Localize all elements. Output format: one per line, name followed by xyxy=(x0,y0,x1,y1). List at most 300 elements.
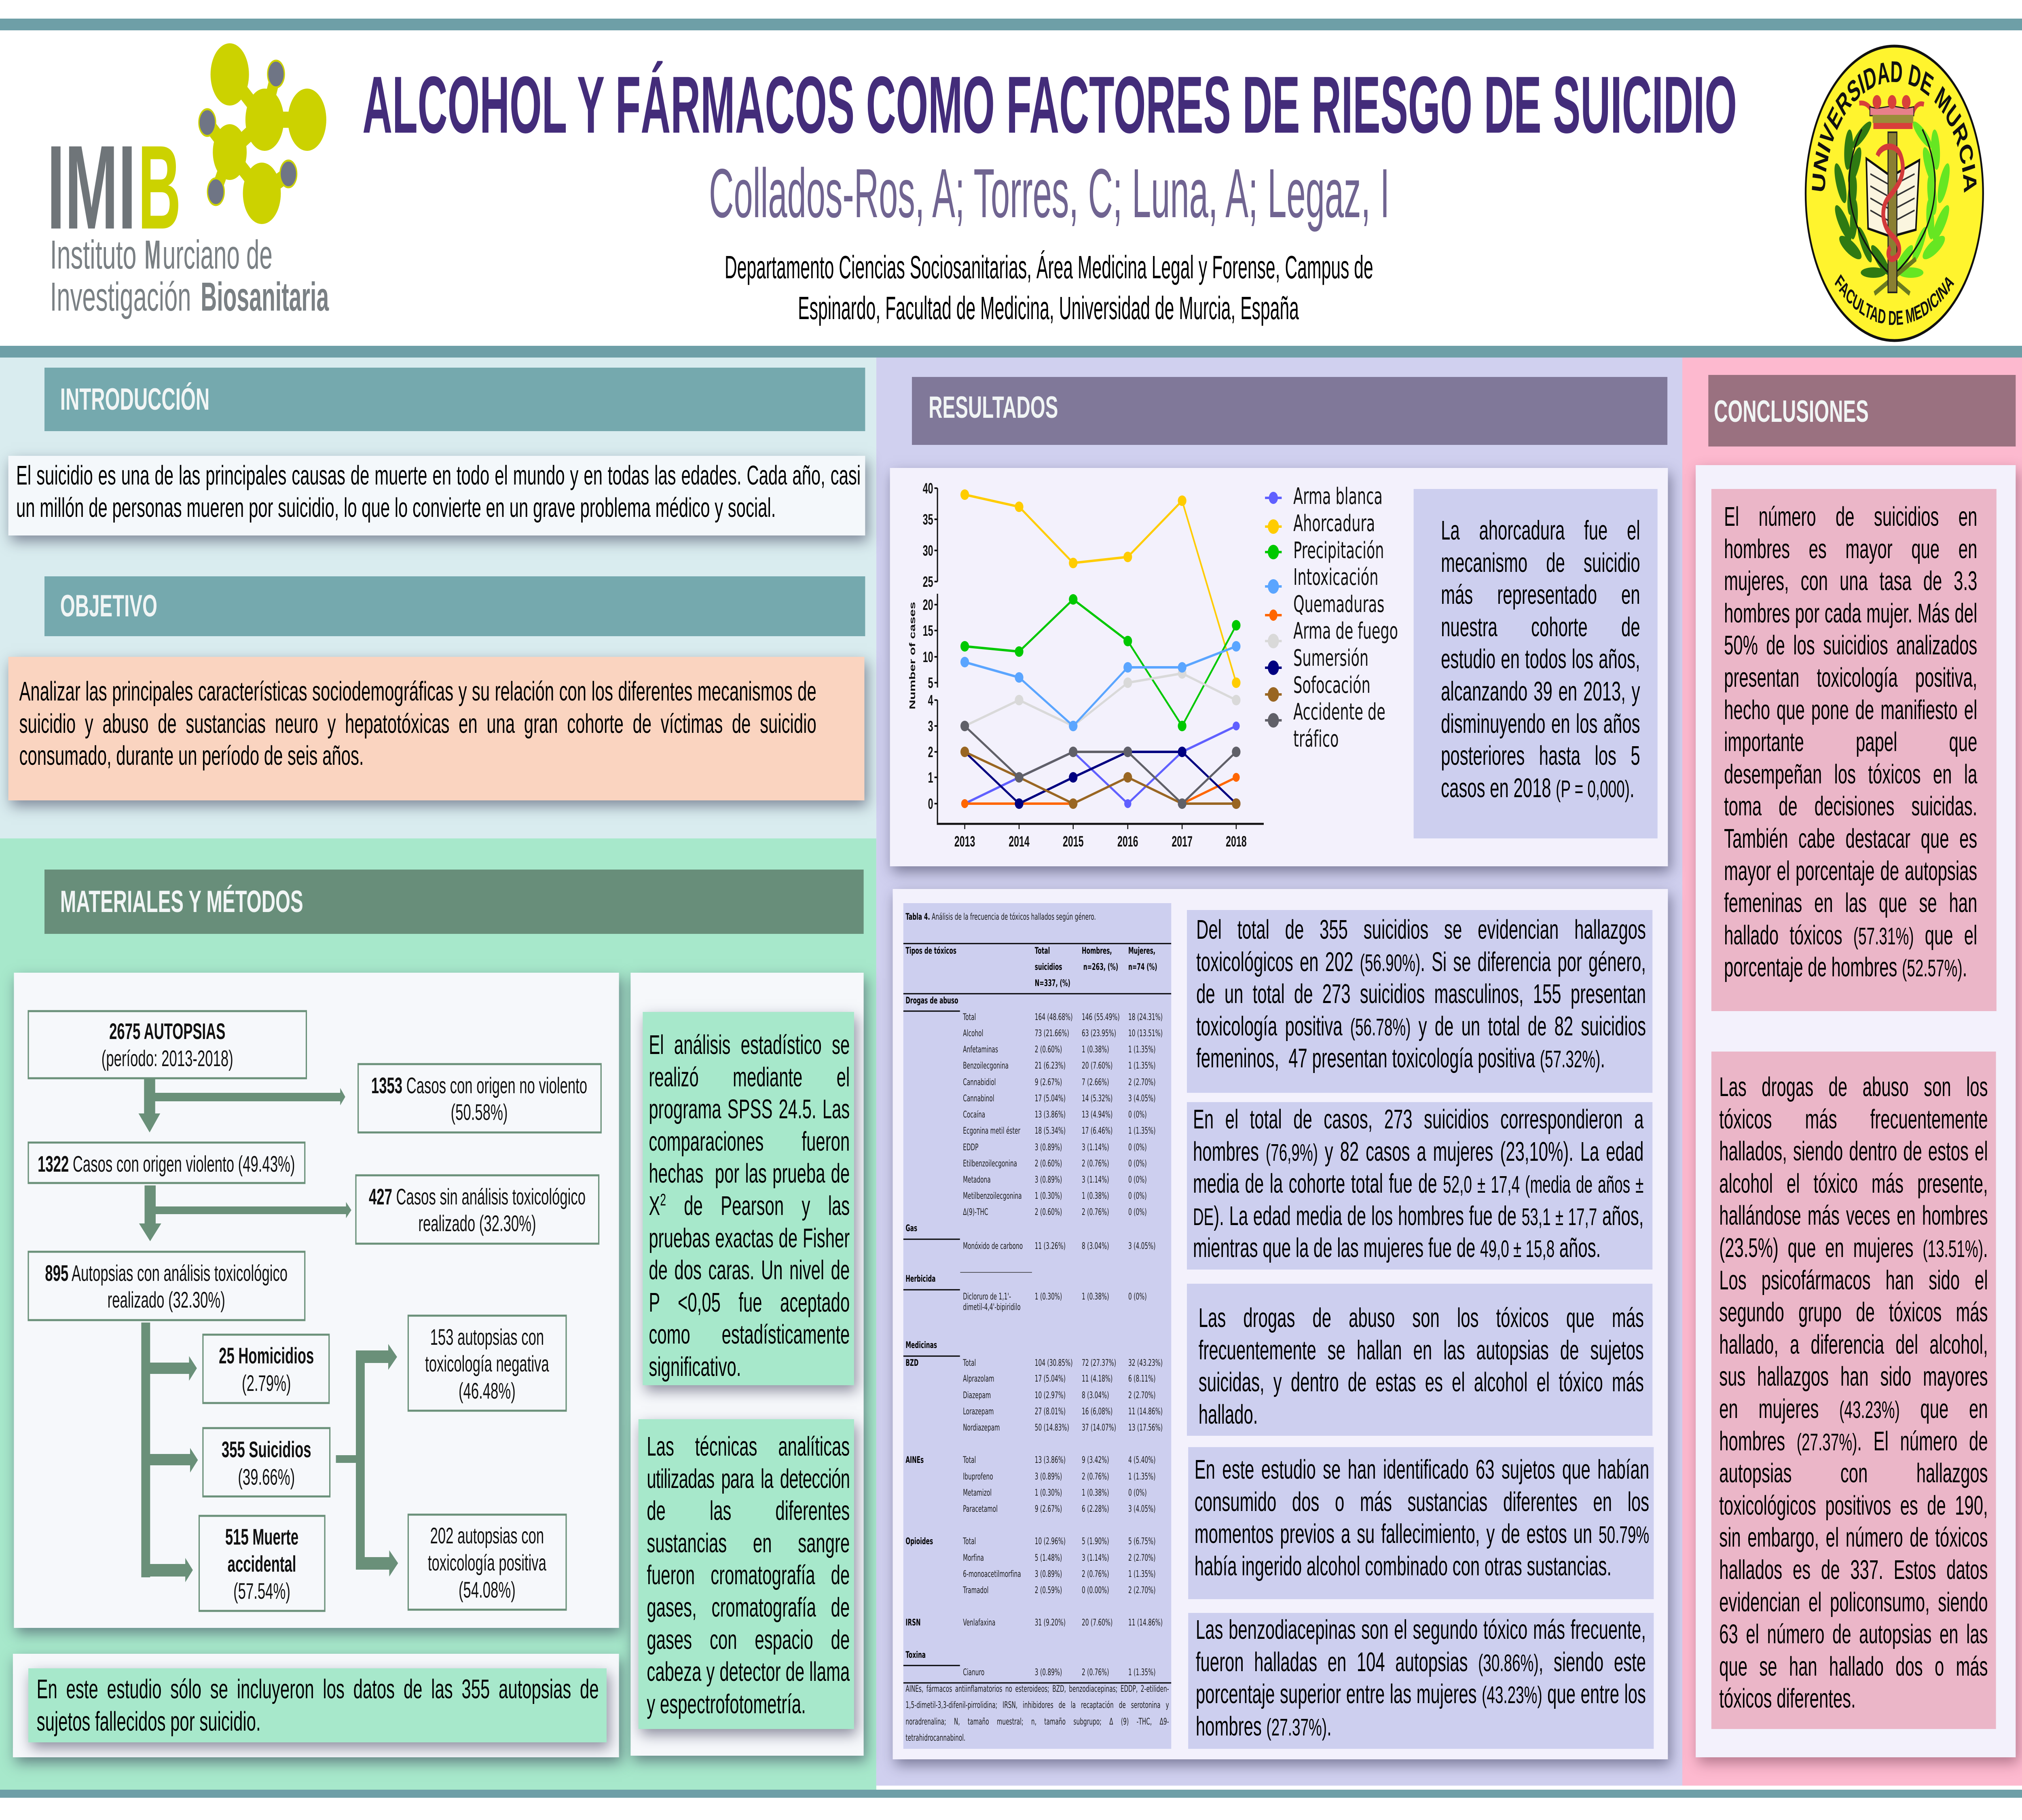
table: frecuencia de tóxicos: 6 (8.11%) xyxy=(1128,1374,1156,1384)
table: frecuencia de tóxicos: 3 (0.89%) xyxy=(1035,1143,1062,1153)
table: frecuencia de tóxicos: 8 (3.04%) xyxy=(1082,1241,1109,1251)
table: frecuencia de tóxicos: 1 (0.38%) xyxy=(1082,1045,1109,1055)
table: frecuencia de tóxicos: Lorazepam xyxy=(963,1407,994,1417)
table: frecuencia de tóxicos: 3 (1.14%) xyxy=(1082,1175,1109,1185)
text: conclusion 1: mujeres, con una tasa de 3.3 xyxy=(1724,566,1977,596)
text: chart commentary: estudio en todos los años, xyxy=(1441,644,1640,674)
legend: Precipitación xyxy=(1293,538,1384,564)
text: conclusion 1: hecho que pone de manifiesto el xyxy=(1724,695,1977,725)
text: statistical analysis: X2 de Pearson y las xyxy=(649,1190,850,1221)
table: frecuencia de tóxicos: Diazepam xyxy=(963,1390,991,1401)
text: age and sex: En el total de casos, 273 suicidios correspondieron a xyxy=(1193,1104,1643,1134)
table: frecuencia de tóxicos: 0 (0%) xyxy=(1128,1175,1147,1185)
series: ahorcadura xyxy=(960,489,1241,688)
title: ALCOHOL Y FÁRMACOS COMO FACTORES DE RIESGO DE SUICIDIO xyxy=(362,60,1737,150)
heading: Introducción xyxy=(44,368,865,431)
legend: Sofocación xyxy=(1293,672,1371,698)
table: frecuencia de tóxicos: 2 (0.60%) xyxy=(1035,1045,1062,1055)
table: frecuencia de tóxicos: 0 (0%) xyxy=(1128,1143,1147,1153)
text: statistical analysis: como estadísticamente xyxy=(649,1319,850,1350)
axes: 25 xyxy=(923,574,933,590)
logo: IMIB: Biosanitaria xyxy=(201,274,329,320)
table: frecuencia de tóxicos: Metadona xyxy=(963,1175,991,1185)
table: frecuencia de tóxicos: 0 (0.00%) xyxy=(1082,1585,1109,1596)
table: frecuencia de tóxicos: N=337, (%) xyxy=(1035,978,1070,988)
table: frecuencia de tóxicos: 7 (2.66%) xyxy=(1082,1077,1109,1088)
text: chart commentary: mecanismo de suicidio xyxy=(1441,548,1640,578)
table: frecuencia de tóxicos: EDDP xyxy=(963,1143,978,1153)
table: frecuencia de tóxicos: Opioides xyxy=(905,1536,933,1547)
text: benzodiazepines: Las benzodiacepinas son el segundo tóxico más frecuente, xyxy=(1196,1615,1646,1645)
table: frecuencia de tóxicos: 17 (5.04%) xyxy=(1035,1094,1066,1104)
table: frecuencia de tóxicos: Metilbenzoilecgonina xyxy=(963,1191,1022,1201)
text: age and sex xyxy=(1187,1102,1652,1270)
axes: 35 xyxy=(923,511,933,528)
affiliation xyxy=(725,249,1373,326)
table: frecuencia de tóxicos: Etilbenzoilecgonina xyxy=(963,1159,1017,1169)
table: frecuencia de tóxicos: 3 (4.05%) xyxy=(1128,1504,1156,1514)
text: conclusion 2: hallados, siendo dentro de estos el xyxy=(1719,1136,1988,1166)
box: 2675 autopsias xyxy=(28,1011,307,1078)
text: statistical analysis: programa SPSS 24.5. Las xyxy=(649,1094,850,1124)
table footnote: tetrahidrocannabinol. xyxy=(905,1733,965,1743)
text: conclusion 2: evidencian el policonsumo, siendo xyxy=(1719,1587,1988,1617)
arrow: autopsias to violent cases xyxy=(138,1078,345,1132)
table: frecuencia de tóxicos: 11 (4.18%) xyxy=(1082,1374,1113,1384)
table: frecuencia de tóxicos: 10 (2.97%) xyxy=(1035,1390,1066,1401)
table: frecuencia de tóxicos: 3 (0.89%) xyxy=(1035,1175,1062,1185)
box: 2675 autopsias: (período: 2013-2018) xyxy=(102,1046,233,1071)
table: frecuencia de tóxicos: IRSN xyxy=(905,1618,920,1628)
text: conclusion 2: toxicológicos positivos es de 190, xyxy=(1719,1490,1988,1521)
axes: 2014 xyxy=(1009,833,1030,850)
table: frecuencia de tóxicos: Mujeres, xyxy=(1128,946,1155,956)
box: toxicología negativa: (46.48%) xyxy=(459,1378,516,1403)
table: frecuencia de tóxicos: 5 (1.48%) xyxy=(1035,1553,1062,1563)
table: frecuencia de tóxicos: Cianuro xyxy=(963,1668,984,1678)
table: frecuencia de tóxicos: Total xyxy=(963,1012,976,1022)
table: frecuencia de tóxicos: Herbicida xyxy=(905,1274,936,1284)
box: suicidios: 355 Suicidios xyxy=(222,1437,311,1462)
text: statistical analysis: significativo. xyxy=(649,1352,741,1382)
axes: Number of cases xyxy=(907,602,917,709)
text: polysubstance: había ingerido alcohol combinado con otras sustancias. xyxy=(1195,1551,1612,1581)
text: analytical techniques xyxy=(639,1419,854,1729)
box: suicidios xyxy=(203,1428,330,1496)
legend: Arma de fuego xyxy=(1293,618,1398,644)
text: analytical techniques: de las diferentes xyxy=(647,1496,850,1526)
table: frecuencia de tóxicos: 2 (0.76%) xyxy=(1082,1569,1109,1579)
table: frecuencia de tóxicos: 73 (21.66%) xyxy=(1035,1029,1069,1039)
text: conclusion 2 xyxy=(1711,1052,1996,1729)
text: conclusion 2: 63 el número de autopsias en las xyxy=(1719,1619,1988,1649)
table: frecuencia de tóxicos: 1 (1.35%) xyxy=(1128,1061,1156,1071)
box: toxicología negativa: toxicología negativa xyxy=(425,1351,549,1376)
table: frecuencia de tóxicos: 0 (0%) xyxy=(1128,1292,1147,1302)
box: 427 casos: realizado (32.30%) xyxy=(418,1211,536,1236)
table: frecuencia de tóxicos: 17 (6.46%) xyxy=(1082,1126,1113,1136)
table: frecuencia de tóxicos: 5 (1.90%) xyxy=(1082,1536,1109,1547)
table: frecuencia de tóxicos: 0 (0%) xyxy=(1128,1159,1147,1169)
table: frecuencia de tóxicos: 1 (0.30%) xyxy=(1035,1191,1062,1201)
text: benzodiazepines xyxy=(1188,1613,1654,1749)
text: toxicology findings: toxicológicos en 202 (56.90%). Si se diferencia por género, xyxy=(1196,947,1646,977)
box: 1353 casos: 1353 Casos con origen no violento xyxy=(371,1073,587,1098)
table: frecuencia de tóxicos: Toxina xyxy=(905,1650,926,1660)
table: frecuencia de tóxicos: n=74 (%) xyxy=(1128,962,1157,972)
text: conclusion 2: hallados es de 337. Estos datos xyxy=(1719,1555,1988,1585)
table: frecuencia de tóxicos: 146 (55.49%) xyxy=(1082,1012,1120,1022)
text: conclusion 2: sus hallazgos han sido mayores xyxy=(1719,1361,1988,1392)
table: frecuencia de tóxicos: 9 (2.67%) xyxy=(1035,1077,1062,1088)
table: frecuencia de tóxicos: Hombres, xyxy=(1082,946,1112,956)
text: statistical analysis: El análisis estadístico se xyxy=(649,1030,850,1060)
box: 895 autopsias xyxy=(28,1252,305,1320)
table: frecuencia de tóxicos: Δ(9)-THC xyxy=(963,1207,988,1217)
table: frecuencia de tóxicos: 164 (48.68%) xyxy=(1035,1012,1073,1022)
table: frecuencia de tóxicos: Cocaína xyxy=(963,1110,985,1120)
series: arma blanca xyxy=(961,722,1240,808)
text: toxicology findings: toxicología positiva (56.78%) y de un total de 82 suicidios xyxy=(1196,1011,1646,1041)
text: drugs of abuse xyxy=(1187,1284,1652,1436)
series: sofocación xyxy=(960,747,1241,809)
text: polysubstance: momentos previos a su fallecimiento, y de estos un 50.79% xyxy=(1195,1519,1649,1549)
text: benzodiazepines: fueron halladas en 104 autopsias (30.86%), siendo este xyxy=(1196,1647,1646,1677)
table: frecuencia de tóxicos: Total xyxy=(963,1358,976,1368)
box: 895 autopsias: realizado (32.30%) xyxy=(108,1287,225,1312)
table: frecuencia de tóxicos: 20 (7.60%) xyxy=(1082,1061,1113,1071)
logo: Universidad de Murcia seal: UNIVERSIDAD DE MURCIA xyxy=(1808,55,1981,194)
table: frecuencia de tóxicos: dimetil-4,4'-bipiridilo xyxy=(963,1302,1021,1312)
table: frecuencia de tóxicos: Morfina xyxy=(963,1553,984,1563)
table: frecuencia de tóxicos: AINEs xyxy=(905,1455,924,1465)
text: toxicology findings: Del total de 355 suicidios se evidencian hallazgos xyxy=(1196,914,1646,945)
legend xyxy=(1265,483,1398,752)
table: frecuencia de tóxicos: 104 (30.85%) xyxy=(1035,1358,1073,1368)
table: frecuencia de tóxicos: 3 (0.89%) xyxy=(1035,1569,1062,1579)
box: homicidios: 25 Homicidios xyxy=(219,1343,314,1368)
arrow: violent cases to toxicology xyxy=(139,1185,351,1241)
text: benzodiazepines: hombres (27.37%). xyxy=(1196,1711,1332,1742)
text: age and sex: mientras que la de las mujeres fue de 49,0 ± 15,8 años. xyxy=(1193,1233,1601,1263)
axes: 3 xyxy=(928,718,933,734)
table: frecuencia de tóxicos: 11 (14.86%) xyxy=(1128,1407,1163,1417)
authors: Collados-Ros, A; Torres, C; Luna, A; Legaz, I xyxy=(709,154,1390,232)
text: conclusion 1: hombres por cada mujer. Más del xyxy=(1724,598,1977,629)
affiliation: Espinardo, Facultad de Medicina, Universidad de Murcia, España xyxy=(798,290,1299,326)
text: chart commentary: nuestra cohorte de xyxy=(1441,612,1640,642)
text: analytical techniques: y espectrofotometría. xyxy=(647,1689,806,1719)
text: chart commentary: alcanzando 39 en 2013, y xyxy=(1441,676,1640,707)
axes: 4 xyxy=(928,692,933,709)
panel: chart xyxy=(890,468,1668,866)
box: 1322 casos: 1322 Casos con origen violento (49.43%) xyxy=(38,1151,295,1177)
table footnote: AINEs, fármacos antiinflamatorios no esteroideos; BZD, benzodiacepinas; EDDP, 2-etiliden- xyxy=(905,1684,1169,1694)
text: toxicology findings: femeninos, 47 presentan toxicología positiva (57.32%). xyxy=(1196,1043,1605,1073)
text: drugs of abuse: suicidas, y dentro de estas es el alcohol el tóxico más xyxy=(1199,1367,1644,1397)
table: frecuencia de tóxicos: 1 (0.38%) xyxy=(1082,1292,1109,1302)
axes: 2017 xyxy=(1172,833,1193,850)
legend: Quemaduras xyxy=(1293,591,1384,618)
text: conclusion 1 xyxy=(1711,489,1997,1011)
table: frecuencia de tóxicos: 11 (14.86%) xyxy=(1128,1618,1163,1628)
box: muerte accidental xyxy=(199,1516,325,1611)
table: frecuencia de tóxicos: Dicloruro de 1,1'- xyxy=(963,1292,1011,1302)
axes: 0 xyxy=(928,796,933,812)
box: muerte accidental: (57.54%) xyxy=(233,1579,290,1604)
box: 1353 casos xyxy=(358,1064,601,1132)
panel: objetivo text: consumado, durante un período de seis años. xyxy=(19,741,364,771)
table: frecuencia de tóxicos: 13 (3.86%) xyxy=(1035,1455,1066,1465)
text: conclusion 1: toma de decisiones suicidas. xyxy=(1724,791,1977,821)
logo: IMIB: Investigación xyxy=(50,274,191,320)
text: analytical techniques: cabeza y detector de llama xyxy=(647,1657,850,1687)
table: frecuencia de tóxicos: 0 (0%) xyxy=(1128,1110,1147,1120)
panel: flowchart xyxy=(14,973,619,1628)
text: statistical analysis: P <0,05 fue aceptado xyxy=(649,1287,850,1318)
heading: Introducción: INTRODUCCIÓN xyxy=(60,382,209,417)
axes: 2 xyxy=(928,744,933,760)
axes: 20 xyxy=(923,597,933,613)
axes: 5 xyxy=(928,675,933,691)
table: frecuencia de tóxicos: 27 (8.01%) xyxy=(1035,1407,1066,1417)
table: frecuencia de tóxicos: 13 (3.86%) xyxy=(1035,1110,1066,1120)
text: polysubstance: consumido dos o más sustancias diferentes en los xyxy=(1195,1487,1649,1517)
axes: 40 xyxy=(923,480,933,497)
text: conclusion 2: tóxicos diferentes. xyxy=(1719,1683,1856,1714)
text: conclusion 2: alcohol el tóxico más presente, xyxy=(1719,1168,1988,1199)
text: chart commentary xyxy=(1414,489,1658,838)
text: polysubstance xyxy=(1188,1447,1654,1599)
panel: introducción text: El suicidio es una de las principales causas de muerte en todo el mundo y en todas las edades. Cada año, casi xyxy=(16,460,861,491)
text: statistical analysis xyxy=(643,1012,854,1385)
panel: inclusion note xyxy=(13,1654,619,1757)
text: analytical techniques: Las técnicas analíticas xyxy=(647,1431,850,1462)
table: frecuencia de tóxicos: 37 (14.07%) xyxy=(1082,1423,1116,1433)
table: frecuencia de tóxicos: 63 (23.95%) xyxy=(1082,1029,1116,1039)
box: homicidios: (2.79%) xyxy=(242,1371,291,1396)
table: frecuencia de tóxicos: 3 (4.05%) xyxy=(1128,1241,1156,1251)
table: frecuencia de tóxicos: 1 (0.30%) xyxy=(1035,1488,1062,1498)
table: frecuencia de tóxicos: 1 (1.35%) xyxy=(1128,1569,1156,1579)
text: statistical analysis: hechas por las prueba de xyxy=(649,1158,850,1189)
table: frecuencia de tóxicos: 6 (2.28%) xyxy=(1082,1504,1109,1514)
table: frecuencia de tóxicos: 14 (5.32%) xyxy=(1082,1094,1113,1104)
box: 427 casos: 427 Casos sin análisis toxicológico xyxy=(369,1184,586,1209)
table: frecuencia de tóxicos: 0 (0%) xyxy=(1128,1191,1147,1201)
header xyxy=(0,0,2022,358)
heading: Resultados xyxy=(912,377,1667,445)
table: frecuencia de tóxicos: 50 (14.83%) xyxy=(1035,1423,1069,1433)
box: toxicología positiva: 202 autopsias con xyxy=(430,1523,544,1548)
heading: Materiales y métodos: MATERIALES Y MÉTODOS xyxy=(60,885,303,919)
table: frecuencia de tóxicos: Paracetamol xyxy=(963,1504,998,1514)
text: statistical analysis: realizó mediante el xyxy=(649,1062,850,1092)
text: conclusion 1: presentan toxicología positiva, xyxy=(1724,662,1977,693)
table: frecuencia de tóxicos: BZD xyxy=(905,1358,918,1368)
logo: IMIB: urciano de xyxy=(163,232,273,277)
text: analytical techniques: sustancias en sangre xyxy=(647,1528,850,1558)
table: frecuencia de tóxicos: 21 (6.23%) xyxy=(1035,1061,1066,1071)
panel: introducción text: un millón de personas mueren por suicidio, lo que lo convierte en un grave problema médico y social. xyxy=(16,493,776,523)
table: frecuencia de tóxicos: 20 (7.60%) xyxy=(1082,1618,1113,1628)
table: frecuencia de tóxicos: Medicinas xyxy=(905,1340,937,1350)
table: frecuencia de tóxicos: 2 (0.60%) xyxy=(1035,1159,1062,1169)
logo: IMIB: M xyxy=(145,232,161,277)
text: chart commentary: La ahorcadura fue el xyxy=(1441,515,1640,546)
line chart: cases by year and mechanism xyxy=(907,480,1264,850)
table: frecuencia de tóxicos: Ecgonina metil éster xyxy=(963,1126,1021,1136)
text: conclusion 1: importante papel que xyxy=(1724,727,1977,757)
series: quemaduras xyxy=(961,773,1240,808)
text: age and sex: DE). La edad media de los hombres fue de 53,1 ± 17,7 años, xyxy=(1193,1201,1643,1231)
text: statistical analysis: pruebas exactas de Fisher xyxy=(649,1223,850,1253)
text: conclusion 2: que se han hallado dos o más xyxy=(1719,1651,1988,1682)
table: frecuencia de tóxicos: 2 (2.70%) xyxy=(1128,1585,1156,1596)
table: frecuencia de tóxicos: Drogas de abuso xyxy=(905,996,958,1006)
box: 1322 casos xyxy=(28,1143,305,1183)
table: frecuencia de tóxicos: 18 (24.31%) xyxy=(1128,1012,1163,1022)
text: conclusion 2: autopsias con hallazgos xyxy=(1719,1458,1988,1488)
box: 895 autopsias: 895 Autopsias con análisis toxicológico xyxy=(45,1261,288,1286)
table: frecuencia de tóxicos: 1 (1.35%) xyxy=(1128,1126,1156,1136)
table: frecuencia de tóxicos: 3 (1.14%) xyxy=(1082,1553,1109,1563)
axes: 1 xyxy=(928,769,933,786)
table: frecuencia de tóxicos: Nordiazepam xyxy=(963,1423,1000,1433)
table footnote: 1,5-dimetil-3,3-difenil-pirrolidina; IRSN, inhibidores de la recaptación de serotonina y xyxy=(905,1700,1169,1710)
table: frecuencia de tóxicos: 2 (2.70%) xyxy=(1128,1553,1156,1563)
table: frecuencia de tóxicos: Cannabinol xyxy=(963,1094,994,1104)
table footnote: noradrenalina; N, tamaño muestral; n, tamaño subgrupo; Δ (9) -THC, Δ9- xyxy=(905,1717,1169,1727)
panel: introducción text xyxy=(8,456,865,535)
legend: Intoxicación xyxy=(1293,564,1378,590)
table: frecuencia de tóxicos: 10 (2.96%) xyxy=(1035,1536,1066,1547)
affiliation: Departamento Ciencias Sociosanitarias, Área Medicina Legal y Forense, Campus de xyxy=(725,249,1373,285)
box: muerte accidental: accidental xyxy=(228,1551,296,1577)
text: conclusion 2: en mujeres (43.23%) que en xyxy=(1719,1394,1988,1424)
axes: 30 xyxy=(923,542,933,559)
text: drugs of abuse: hallado. xyxy=(1199,1399,1258,1430)
table: frecuencia de tóxicos: 17 (5.04%) xyxy=(1035,1374,1066,1384)
text: conclusion 1: 50% de los suicidios analizados xyxy=(1724,630,1977,660)
text: conclusion 2: hallado, a diferencia del alcohol, xyxy=(1719,1329,1988,1360)
table: frecuencia de tóxicos: 2 (2.70%) xyxy=(1128,1390,1156,1401)
text: age and sex: media de la cohorte total fue de 52,0 ± 17,4 (media de años ± xyxy=(1193,1168,1643,1199)
heading: Resultados: RESULTADOS xyxy=(929,390,1058,425)
table: frecuencia de tóxicos: 72 (27.37%) xyxy=(1082,1358,1116,1368)
callout: only suicides included xyxy=(28,1668,607,1742)
table: frecuencia de tóxicos: 2 (0.76%) xyxy=(1082,1159,1109,1169)
table: frecuencia de tóxicos: 1 (1.35%) xyxy=(1128,1668,1156,1678)
axes: 10 xyxy=(923,649,933,665)
logo: IMIB: IMI xyxy=(47,121,136,254)
table: frecuencia de tóxicos: 3 (0.89%) xyxy=(1035,1668,1062,1678)
text: analytical techniques: utilizadas para la detección xyxy=(647,1464,850,1494)
box: toxicología positiva xyxy=(408,1515,566,1610)
text: drugs of abuse: Las drogas de abuso son los tóxicos que más xyxy=(1199,1303,1644,1333)
heading: Objetivo xyxy=(44,576,865,636)
table: frecuencia de tóxicos: 2 (0.60%) xyxy=(1035,1207,1062,1217)
text: toxicology findings xyxy=(1187,910,1652,1093)
text: statistical analysis: de dos caras. Un nivel de xyxy=(649,1255,850,1285)
table: frecuencia de tóxicos: Anfetaminas xyxy=(963,1045,998,1055)
text: conclusion 1: porcentaje de hombres (52.57%). xyxy=(1724,952,1967,982)
legend: Accidente de xyxy=(1293,699,1385,725)
text: conclusion 1: femeninas en las que se han xyxy=(1724,888,1977,918)
table: frecuencia de tóxicos: n=263, (%) xyxy=(1083,962,1118,972)
table: frecuencia de tóxicos: 2 (0.76%) xyxy=(1082,1668,1109,1678)
text: statistical analysis: comparaciones fueron xyxy=(649,1126,850,1157)
table: frecuencia de tóxicos: 8 (3.04%) xyxy=(1082,1390,1109,1401)
table: frecuencia de tóxicos: 1 (1.35%) xyxy=(1128,1045,1156,1055)
table: frecuencia de tóxicos: 10 (13.51%) xyxy=(1128,1029,1163,1039)
series: sumersión xyxy=(965,747,1241,809)
arrow: toxicology to outcomes xyxy=(141,1323,198,1582)
panel: statistical methods xyxy=(630,973,864,1756)
logo: IMIB: B xyxy=(138,121,181,254)
callout: only suicides included: sujetos fallecidos por suicidio. xyxy=(37,1706,261,1737)
panel: conclusions xyxy=(1696,465,2016,1757)
table: frecuencia de tóxicos: 2 (0.59%) xyxy=(1035,1585,1062,1596)
table: frecuencia de tóxicos: 5 (6.75%) xyxy=(1128,1536,1156,1547)
text: conclusion 1: También cabe destacar que es xyxy=(1724,823,1977,854)
table footnote xyxy=(905,1681,1169,1746)
table: frecuencia de tóxicos: Venlafaxina xyxy=(963,1618,995,1628)
table: frecuencia de tóxicos: Cannabidiol xyxy=(963,1077,996,1088)
table: frecuencia de tóxicos: 1 (0.38%) xyxy=(1082,1488,1109,1498)
axes xyxy=(907,480,1264,850)
box: 2675 autopsias: 2675 AUTOPSIAS xyxy=(109,1019,225,1044)
text: analytical techniques: fueron cromatografía de xyxy=(647,1560,850,1590)
text: conclusion 1: mayor el porcentaje de autopsias xyxy=(1724,856,1977,886)
logo: IMIB: Instituto xyxy=(50,232,137,277)
table: frecuencia de tóxicos: 9 (3.42%) xyxy=(1082,1455,1109,1465)
heading: Conclusiones: CONCLUSIONES xyxy=(1714,394,1869,429)
box: suicidios: (39.66%) xyxy=(238,1464,295,1490)
text: conclusion 1: El número de suicidios en xyxy=(1724,502,1977,532)
table: frecuencia de tóxicos: 2 (2.70%) xyxy=(1128,1077,1156,1088)
series: intoxicación xyxy=(960,641,1241,731)
table: frecuencia de tóxicos: Tipos de tóxicos xyxy=(905,946,956,956)
table: frecuencia de tóxicos: Total xyxy=(963,1536,976,1547)
panel: objetivo text: suicidio y abuso de sustancias neuro y hepatotóxicas en una gran cohorte de víctimas de suicidio xyxy=(19,709,816,739)
text: analytical techniques: gases con espacio de xyxy=(647,1625,850,1655)
table: frecuencia de tóxicos: 11 (3.26%) xyxy=(1035,1241,1066,1251)
text: conclusion 2: Las drogas de abuso son los xyxy=(1719,1072,1988,1102)
table: frecuencia de tóxicos: 1 (0.30%) xyxy=(1035,1292,1062,1302)
table: frecuencia de tóxicos: Alprazolam xyxy=(963,1374,994,1384)
series: arma de fuego xyxy=(965,668,1241,731)
text: analytical techniques: gases, cromatografía de xyxy=(647,1592,850,1623)
logo: Universidad de Murcia seal xyxy=(1806,46,1983,341)
panel: toxicology table and findings xyxy=(893,889,1668,1759)
table: frecuencia de tóxicos: Metamizol xyxy=(963,1488,992,1498)
table: frecuencia de tóxicos: Alcohol xyxy=(963,1029,983,1039)
heading: Materiales y métodos xyxy=(44,870,864,934)
text: conclusion 2: hombres (27.37%). El número de xyxy=(1719,1426,1988,1456)
text: conclusion 2: sin embargo, el número de tóxicos xyxy=(1719,1522,1988,1553)
box: toxicología positiva: (54.08%) xyxy=(459,1577,516,1602)
panel: objetivo text xyxy=(8,657,865,800)
table: frecuencia de tóxicos: 3 (0.89%) xyxy=(1035,1472,1062,1482)
text: conclusion 2: tóxicos más frecuentemente xyxy=(1719,1104,1988,1134)
table: frecuencia de tóxicos: 9 (2.67%) xyxy=(1035,1504,1062,1514)
table: frecuencia de tóxicos: 1 (0.38%) xyxy=(1082,1191,1109,1201)
text: conclusion 1: hombres es mayor que en xyxy=(1724,534,1977,564)
legend: Sumersión xyxy=(1293,645,1368,671)
box: toxicología positiva: toxicología positiva xyxy=(428,1550,546,1575)
table: frecuencia de tóxicos: 13 (4.94%) xyxy=(1082,1110,1113,1120)
